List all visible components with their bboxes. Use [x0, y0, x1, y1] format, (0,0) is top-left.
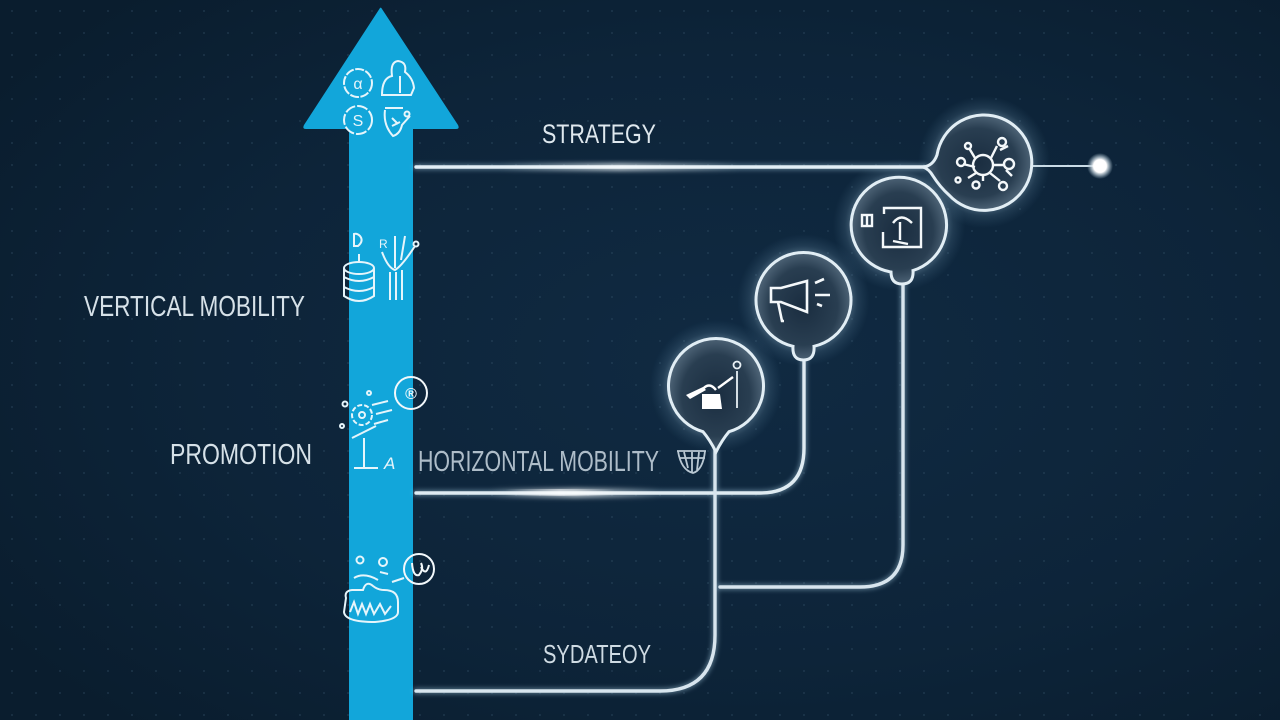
end point dot	[1087, 153, 1113, 179]
icon: coin badge: ®	[405, 386, 417, 403]
heading: vertical mobility: VERTICAL MOBILITY	[84, 291, 305, 323]
node: framework	[851, 177, 947, 284]
icon: presenter with pointer	[686, 362, 740, 409]
icon: small shield mark	[677, 451, 706, 473]
heading: strategy: STRATEGY	[542, 119, 656, 149]
icon: megaphone	[771, 279, 830, 321]
connector lines	[416, 166, 1095, 691]
heading: horizontal mobility: HORIZONTAL MOBILITY	[418, 446, 659, 478]
icon: framed target	[862, 208, 921, 247]
blue rising arrow	[303, 8, 459, 720]
icon: gear coin: α	[353, 76, 363, 93]
node: megaphone	[756, 252, 851, 360]
heading: lower label: SYDATEOY	[543, 639, 651, 669]
icon: promotion figure: A	[383, 454, 395, 473]
node: strategy network	[923, 115, 1032, 210]
horizontal mobility connector line	[416, 360, 804, 493]
icon: wave badge	[404, 554, 434, 584]
icon: figure group	[382, 61, 414, 95]
icon: second coin: S	[353, 113, 363, 130]
node halos	[650, 96, 1050, 452]
icon: network hub	[956, 138, 1014, 190]
lower connector line	[416, 450, 715, 691]
icon: database with branches: R	[379, 237, 388, 251]
strategy connector line	[416, 165, 925, 169]
icons on arrow head	[344, 61, 414, 136]
upper right connector line	[720, 284, 903, 587]
heading: promotion: PROMOTION	[170, 439, 312, 471]
icon: cloud hand group	[344, 556, 404, 622]
line highlights	[490, 163, 740, 498]
icon: coin badge	[395, 377, 427, 409]
icon: database with branches	[344, 234, 418, 301]
icon: head with nodes	[385, 108, 410, 136]
node: presenter	[668, 339, 764, 452]
connector glow	[416, 167, 925, 691]
output line	[1032, 165, 1095, 167]
icon: promotion figure	[340, 391, 395, 473]
